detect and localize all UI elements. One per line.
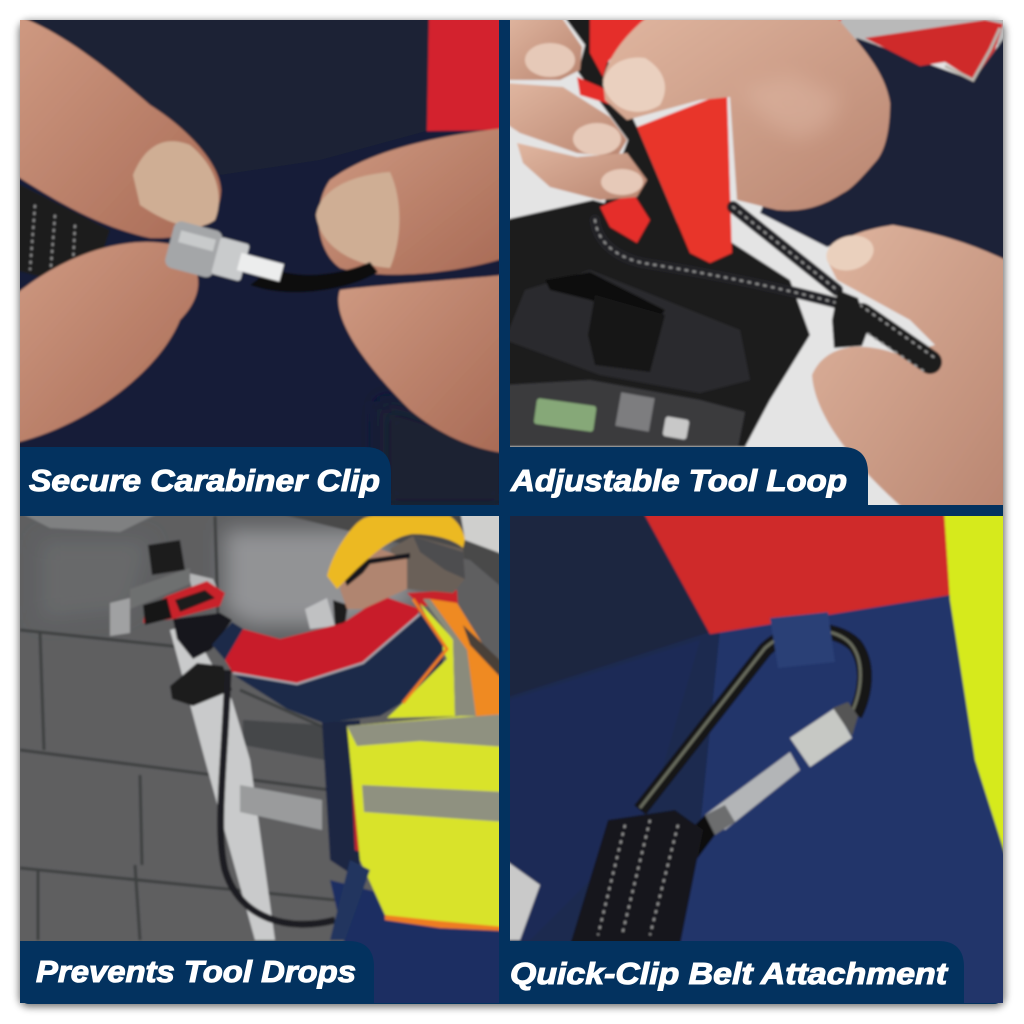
- vest text: [463, 625, 505, 682]
- lower right hand: [812, 225, 1010, 510]
- webbing strap: [570, 810, 703, 945]
- elastic cord loop: [595, 207, 935, 372]
- label: adjustable tool loop: Adjustable Tool Loop: [510, 463, 847, 498]
- tether cord: [221, 670, 335, 924]
- red sleeve detail: [865, 20, 1003, 80]
- label: quick-clip belt attachment: [499, 941, 964, 1003]
- glasses: [340, 553, 410, 586]
- panel: secure carabiner clip photo: [15, 15, 510, 510]
- sleeve red: [225, 596, 420, 684]
- carabiner body: [640, 631, 864, 810]
- silver lock barrel: [164, 220, 286, 284]
- wall bracket: [130, 568, 190, 609]
- red cuff: [642, 510, 950, 634]
- panel: quick-clip belt attachment photo: [505, 510, 1010, 1010]
- cord lock: [832, 290, 868, 348]
- head hair and band: [390, 536, 465, 593]
- red top strip: [837, 20, 842, 22]
- block mortar joints: [20, 516, 335, 940]
- right lower finger: [338, 275, 505, 453]
- belt loop: [770, 612, 835, 668]
- thumbnail left: [133, 141, 219, 227]
- navy jumper: [505, 510, 710, 698]
- glove: [173, 613, 232, 659]
- face: [340, 549, 407, 609]
- reflective bands: [347, 714, 505, 747]
- drill: [143, 581, 225, 623]
- battery body: [505, 200, 810, 447]
- panel: adjustable tool loop photo: [505, 15, 1010, 510]
- label: secure carabiner clip: [20, 447, 391, 505]
- vest orange back: [430, 599, 505, 732]
- navy sleeve: [760, 30, 1010, 265]
- vest grey strap: [423, 599, 476, 716]
- black handle body: [565, 20, 679, 226]
- hard hat: [327, 516, 465, 589]
- left upper thumb: [15, 15, 221, 238]
- battery clip: [588, 295, 665, 372]
- battery lower front: [505, 380, 745, 447]
- silver gate: [705, 752, 800, 830]
- lighter wall area: [225, 530, 420, 625]
- palm highlight: [754, 80, 835, 136]
- wall recess: [243, 720, 325, 760]
- label: secure carabiner clip: Secure Carabiner Clip: [29, 463, 380, 498]
- right thumbnail: [316, 172, 399, 268]
- collar: [407, 590, 458, 606]
- floor sliver: [505, 860, 540, 940]
- carabiner black gate: [250, 262, 378, 292]
- ladder: [170, 625, 275, 940]
- red cuff: [427, 15, 505, 131]
- sleeve navy: [235, 613, 443, 723]
- red handle upper: [590, 15, 650, 77]
- finger two: [505, 83, 627, 157]
- label: prevents tool drops: Prevents Tool Drops: [36, 954, 356, 989]
- thumb nail: [603, 57, 665, 112]
- finger three: [517, 143, 647, 200]
- panel: prevents tool drops photo: [15, 510, 505, 1010]
- label: quick-clip belt attachment: Quick-Clip Belt Attachment: [510, 956, 949, 991]
- left lower finger: [15, 242, 198, 443]
- right top thumb: [319, 128, 505, 275]
- vest shoulder yellow: [387, 603, 455, 718]
- cuff: [212, 622, 243, 660]
- top hand back: [603, 15, 890, 210]
- vest orange piping: [403, 599, 447, 703]
- sweater upper: [34, 20, 218, 170]
- tether strap: [20, 184, 110, 276]
- hi-vis edge: [944, 510, 1010, 870]
- tool battery: [170, 663, 232, 706]
- label: prevents tool drops: [20, 941, 374, 1003]
- trousers lighter: [660, 595, 1010, 1010]
- ceiling beam: [26, 516, 154, 533]
- sleeve piping: [233, 614, 420, 684]
- finger one: [505, 15, 582, 80]
- label: adjustable tool loop: [499, 447, 868, 505]
- hi-vis vest body: [347, 712, 505, 930]
- lanyard: [330, 860, 370, 940]
- dark trouser shadow: [368, 393, 495, 454]
- upper left wall: [46, 546, 138, 612]
- worker trousers: [330, 880, 505, 1010]
- red handle main: [637, 92, 732, 263]
- red handle wedge: [600, 193, 650, 243]
